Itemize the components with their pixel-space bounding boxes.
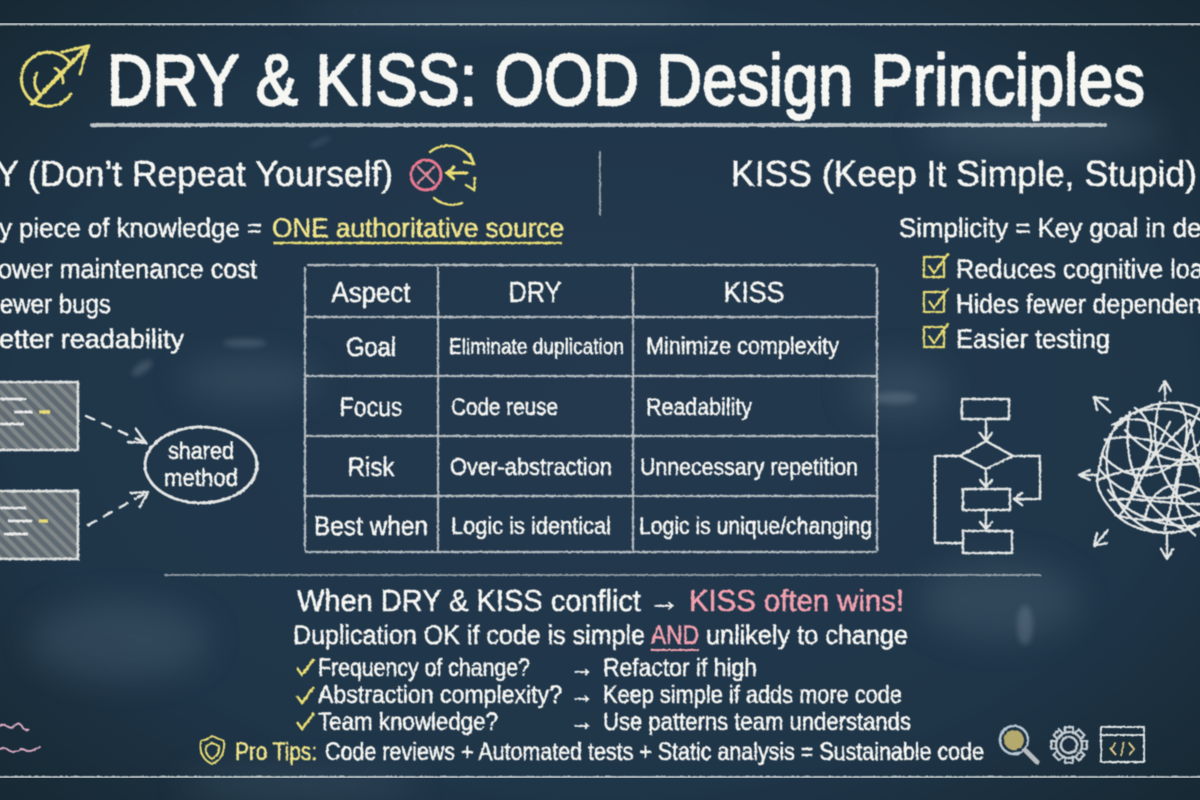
row: goal: Minimize complexity	[646, 333, 839, 360]
header row: Aspect	[332, 277, 410, 309]
conflict heading	[297, 583, 904, 618]
code block 2	[0, 491, 78, 559]
section divider	[165, 574, 1040, 576]
row: focus: Code reuse	[451, 394, 558, 421]
row: goal: Eliminate duplication	[449, 334, 624, 359]
check 3	[297, 708, 911, 736]
check 3: Use patterns team understands	[603, 708, 911, 736]
DRY definition	[0, 213, 564, 243]
conflict heading: When DRY & KISS conflict	[297, 583, 641, 618]
panel: DRY	[0, 146, 564, 559]
icon: code window	[1101, 727, 1144, 762]
tangled scribble ball	[1079, 381, 1200, 559]
row: goal	[346, 332, 839, 362]
decision checklist	[297, 654, 911, 736]
top border line	[0, 21, 1200, 25]
row: focus	[340, 392, 752, 422]
icon: shield	[200, 736, 224, 764]
conflict subheading	[293, 620, 908, 650]
conflict subheading: AND	[651, 620, 699, 650]
shared method bubble: shared	[168, 438, 234, 465]
header row: KISS	[724, 277, 784, 309]
check 1: →	[570, 654, 594, 682]
check 3: Team knowledge?	[318, 708, 498, 736]
header row: DRY	[508, 277, 562, 309]
row: best when: Logic is identical	[451, 513, 611, 540]
code block 1	[0, 382, 78, 450]
icon: magnifier	[1000, 726, 1037, 762]
check 1	[297, 654, 757, 682]
row: best when: Best when	[314, 511, 428, 541]
check 2: Abstraction complexity?	[318, 681, 562, 709]
flowchart	[935, 399, 1040, 553]
check 1: Refactor if high	[603, 654, 757, 682]
header row	[332, 277, 784, 309]
row: risk: Unnecessary repetition	[640, 454, 858, 481]
pro tips: Code reviews + Automated tests + Static analysis = Sustainable code	[325, 738, 984, 766]
conflict subheading: unlikely to change	[706, 620, 908, 650]
title underline	[92, 123, 1105, 127]
KISS benefits list: Easier testing	[956, 324, 1110, 354]
icon: gear	[1051, 727, 1087, 763]
comparison table	[305, 265, 877, 552]
icon: no repeat cycle	[411, 146, 475, 205]
squiggle decorations	[0, 724, 40, 752]
diagram: duplicated code to shared method	[0, 382, 257, 559]
KISS heading: KISS (Keep It Simple, Stupid)	[731, 153, 1197, 194]
pro tips: Pro Tips:	[235, 738, 317, 766]
conflict subheading: Duplication OK if code is simple	[293, 620, 645, 650]
row: risk	[348, 452, 858, 482]
check 2: →	[570, 681, 594, 709]
check 3: →	[570, 708, 594, 736]
check 2	[297, 681, 902, 709]
bottom border line	[0, 776, 1200, 780]
shared method bubble: method	[164, 465, 238, 492]
row: risk: Risk	[348, 452, 395, 482]
panel: KISS	[731, 153, 1200, 559]
check 2: Keep simple if adds more code	[603, 681, 902, 709]
row: risk: Over-abstraction	[450, 454, 612, 481]
icon: target with arrow	[21, 46, 88, 106]
check 1: Frequency of change?	[318, 654, 530, 682]
row: focus: Focus	[340, 392, 402, 422]
row: best when	[314, 511, 872, 541]
KISS benefits list	[956, 254, 1200, 354]
shared method bubble	[145, 427, 257, 503]
arrow 2	[88, 492, 148, 525]
row: best when: Logic is unique/changing	[639, 513, 872, 540]
table grid	[305, 265, 877, 552]
DRY benefits list	[0, 254, 257, 354]
row: focus: Readability	[646, 394, 752, 421]
conflict heading: KISS often wins!	[689, 583, 904, 618]
center divider	[599, 152, 601, 215]
icons: checkboxes	[924, 254, 948, 347]
conflict heading: →	[648, 583, 680, 618]
row: goal: Goal	[346, 332, 396, 362]
DRY definition: ONE authoritative source	[272, 213, 564, 243]
arrow 1	[86, 416, 146, 443]
